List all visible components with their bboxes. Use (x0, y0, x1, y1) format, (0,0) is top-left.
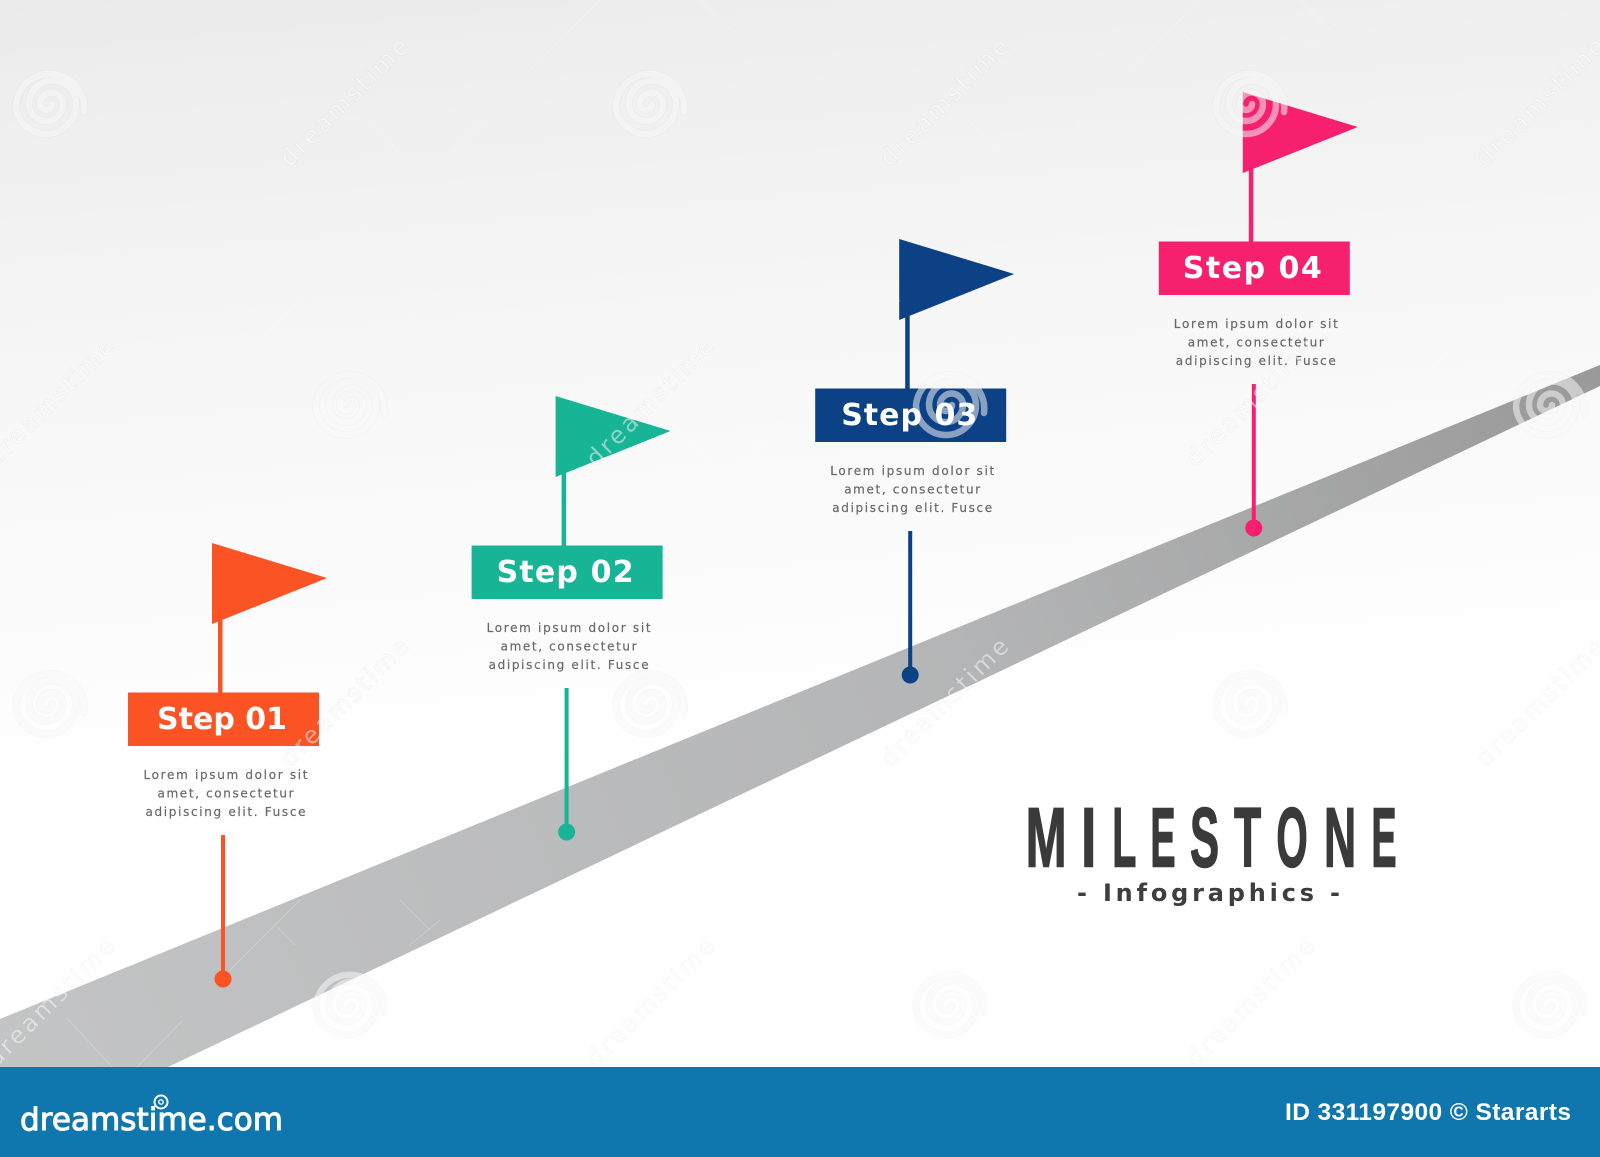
watermark overlay: dreamstime (874, 32, 1014, 172)
pole 02 (562, 473, 566, 546)
step 01 (128, 543, 327, 988)
step 02 connector and dot (558, 688, 575, 840)
step 02 label box (472, 546, 663, 599)
title: MILESTONE: E (1150, 790, 1176, 885)
title: MILESTONE: E (1371, 790, 1397, 885)
title: MILESTONE: I (1081, 792, 1096, 885)
step 02 description: amet, consectetur (501, 640, 637, 654)
step 01 connector and dot (214, 835, 232, 988)
step 03 label box: Step 03 (841, 398, 977, 433)
flag 02 (556, 396, 671, 477)
watermark overlay: dreamstime (274, 632, 414, 772)
step 03 description: adipiscing elit. Fusce (832, 501, 992, 515)
step 03 connector and dot (902, 531, 919, 684)
title: MILESTONE: T (1234, 792, 1261, 885)
step 01 description: Lorem ipsum dolor sit (144, 768, 308, 782)
title: MILESTONE: L (1112, 791, 1136, 884)
pole 04 (1249, 169, 1253, 242)
step 04 description: adipiscing elit. Fusce (1176, 354, 1336, 368)
step 04 connector and dot (1245, 384, 1262, 536)
title: MILESTONE: M (1026, 791, 1067, 885)
step 04 description: amet, consectetur (1188, 336, 1324, 350)
step 03 (815, 239, 1014, 684)
title: MILESTONE: O (1276, 790, 1308, 884)
step 02 description: Lorem ipsum dolor sit (487, 621, 651, 635)
title: MILESTONE: N (1324, 792, 1356, 885)
title: MILESTONE: S (1190, 791, 1219, 885)
step 04 (1159, 92, 1358, 536)
step 01 description: adipiscing elit. Fusce (146, 805, 306, 819)
step 02 label box: Step 02 (497, 555, 634, 590)
watermark overlay: dreamstime (580, 332, 720, 472)
pole 03 (905, 316, 910, 389)
step 04 label box: Step 04 (1183, 251, 1322, 286)
watermark overlay: dreamstime (1180, 332, 1320, 472)
step 04 description: Lorem ipsum dolor sit (1174, 317, 1338, 331)
watermark overlay: dreamstime (1180, 932, 1320, 1072)
watermark overlay: dreamstime (874, 632, 1014, 772)
step 02 (472, 396, 671, 840)
step 01 description: amet, consectetur (158, 786, 294, 800)
title: MILESTONE (1026, 790, 1397, 885)
step 03 label box (815, 388, 1006, 442)
flag 03 (899, 239, 1014, 320)
footer logo: dreamstime.com: dreamstime.com (20, 1102, 283, 1138)
step 02 description: adipiscing elit. Fusce (489, 658, 649, 672)
step 04 label box (1159, 242, 1350, 295)
flag 01 (212, 543, 327, 624)
pole 01 (218, 620, 222, 693)
flag 04 (1243, 92, 1358, 173)
step 01 label box (128, 692, 319, 746)
watermark overlay: dreamstime (580, 932, 720, 1072)
footer banner (0, 1067, 1600, 1157)
grey diagonal road (0, 365, 1600, 1067)
step 03 description: Lorem ipsum dolor sit (830, 464, 994, 478)
step 03 description: amet, consectetur (844, 482, 980, 496)
step 01 label box: Step 01 (157, 702, 287, 737)
footer image id and credit: ID 331197900 © Stararts (1285, 1099, 1571, 1126)
subtitle: Infographics: - Infographics - (1077, 879, 1340, 907)
watermark overlay: dreamstime (274, 32, 414, 172)
